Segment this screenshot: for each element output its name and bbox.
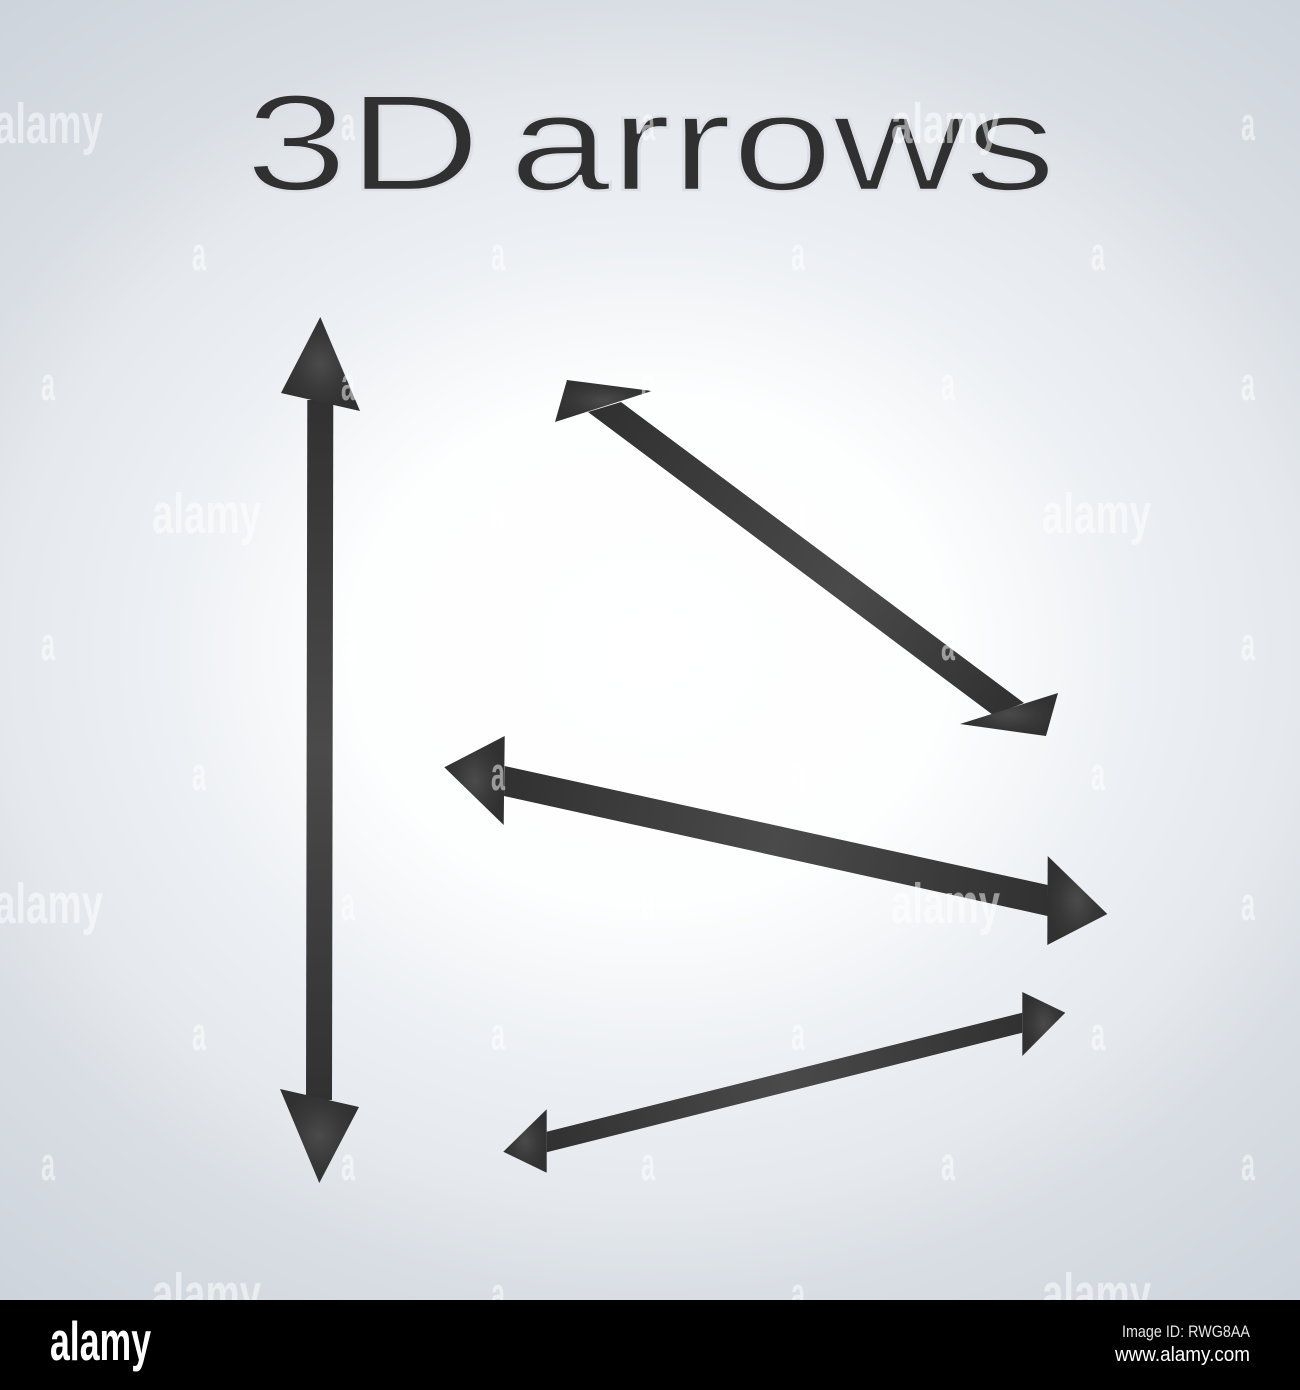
watermark pattern: a <box>641 877 655 930</box>
website: www.alamy.com <box>1114 1344 1250 1366</box>
watermark pattern: a <box>1091 1007 1105 1060</box>
watermark pattern: alamy <box>1042 482 1151 546</box>
arrow: vertical double-headed <box>280 317 360 1183</box>
watermark pattern: a <box>641 97 655 150</box>
watermark pattern: a <box>192 227 206 280</box>
watermark pattern: a <box>491 1267 505 1320</box>
watermark pattern: a <box>941 1137 955 1190</box>
watermark pattern: alamy <box>152 1262 261 1326</box>
watermark pattern: a <box>341 617 355 670</box>
watermark pattern: a <box>491 1007 505 1060</box>
watermark pattern: a <box>41 1137 55 1190</box>
watermark pattern: a <box>491 747 505 800</box>
watermark pattern: a <box>791 1267 805 1320</box>
watermark pattern: a <box>791 487 805 540</box>
watermark pattern: a <box>791 227 805 280</box>
watermark pattern: a <box>791 747 805 800</box>
arrow: wide double-headed <box>444 736 1107 945</box>
watermark pattern: a <box>1241 1137 1255 1190</box>
watermark pattern: a <box>341 357 355 410</box>
watermark pattern: alamy <box>891 92 1000 156</box>
watermark pattern: a <box>192 747 206 800</box>
watermark pattern: a <box>41 357 55 410</box>
watermark pattern: a <box>1241 357 1255 410</box>
watermark pattern: a <box>641 1137 655 1190</box>
arrow: thin double-headed <box>503 992 1065 1173</box>
watermark pattern: a <box>1241 877 1255 930</box>
title: 3D <box>245 67 481 220</box>
watermark pattern: a <box>1091 227 1105 280</box>
watermark pattern: a <box>341 877 355 930</box>
watermark pattern: a <box>1241 617 1255 670</box>
arrow: diagonal double-headed <box>555 380 1058 736</box>
title <box>245 67 1056 220</box>
watermark pattern: alamy <box>152 482 261 546</box>
title: arrows <box>509 67 1056 220</box>
watermark pattern: a <box>491 487 505 540</box>
watermark pattern: alamy <box>891 872 1000 936</box>
footer bar <box>0 1300 1300 1390</box>
watermark pattern: a <box>341 97 355 150</box>
watermark pattern: alamy <box>1042 1262 1151 1326</box>
watermark pattern: a <box>791 1007 805 1060</box>
watermark pattern: a <box>192 1007 206 1060</box>
watermark pattern: a <box>1241 97 1255 150</box>
watermark pattern: a <box>1091 747 1105 800</box>
image id: Image ID: RWG8AA <box>1122 1322 1251 1341</box>
watermark pattern: a <box>341 1137 355 1190</box>
watermark pattern: a <box>41 617 55 670</box>
watermark pattern: a <box>491 227 505 280</box>
watermark pattern: a <box>941 357 955 410</box>
watermark pattern: a <box>641 357 655 410</box>
watermark pattern: a <box>641 617 655 670</box>
footer logo: alamy <box>50 1310 151 1372</box>
watermark pattern: a <box>941 617 955 670</box>
